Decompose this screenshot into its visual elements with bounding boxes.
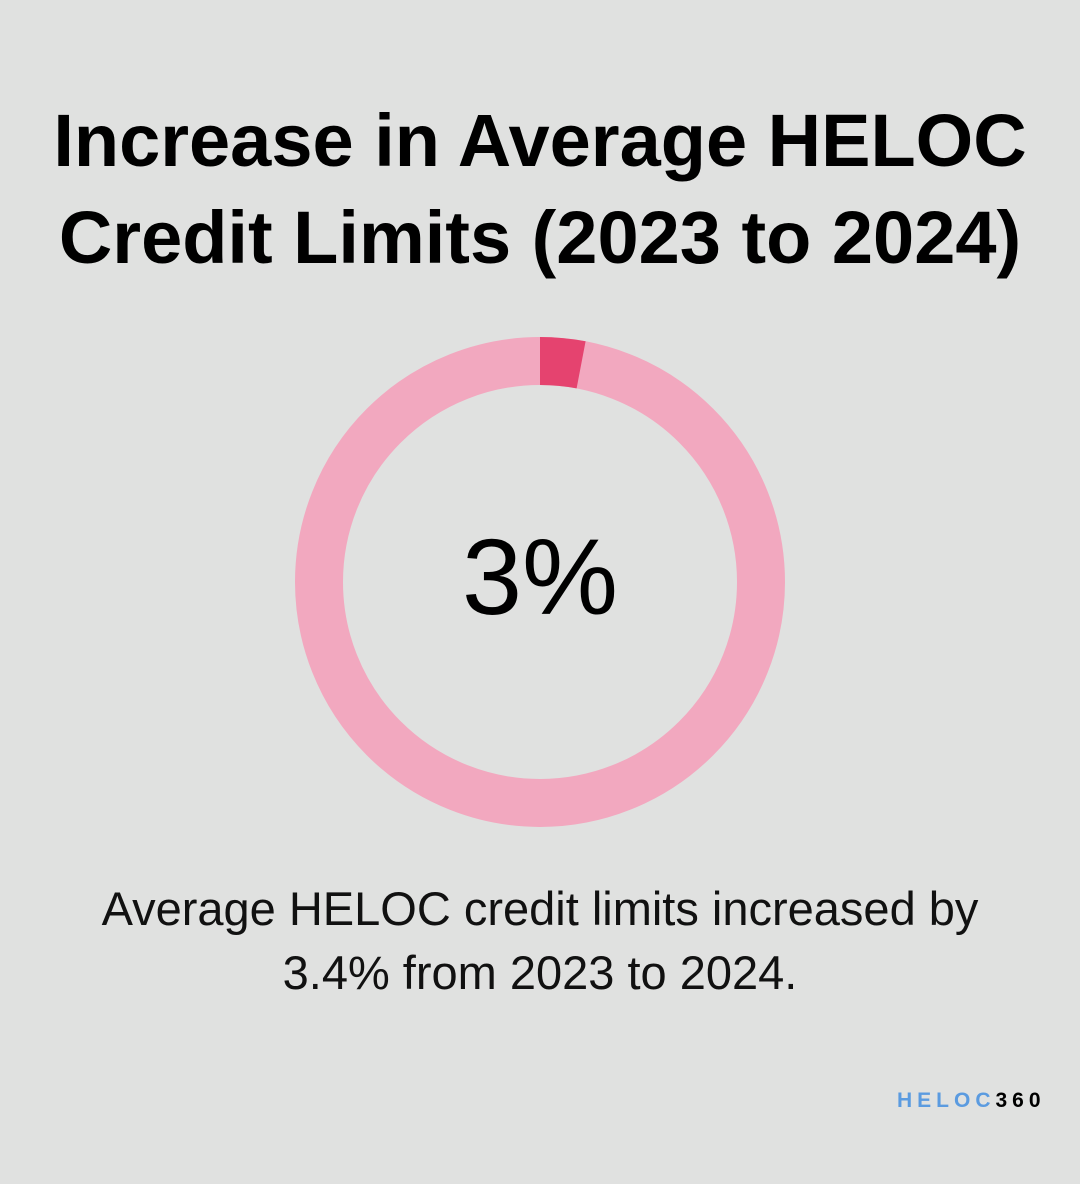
description text: Average HELOC credit limits increased by (102, 882, 978, 935)
description text (102, 882, 978, 999)
title: Increase in Average HELOC (53, 99, 1027, 182)
description text: 3.4% from 2023 to 2024. (283, 946, 797, 999)
value label: 3% (462, 516, 618, 637)
title (53, 99, 1027, 279)
title: Credit Limits (2023 to 2024) (59, 196, 1021, 279)
logo: HELOC360 (897, 1089, 1046, 1112)
